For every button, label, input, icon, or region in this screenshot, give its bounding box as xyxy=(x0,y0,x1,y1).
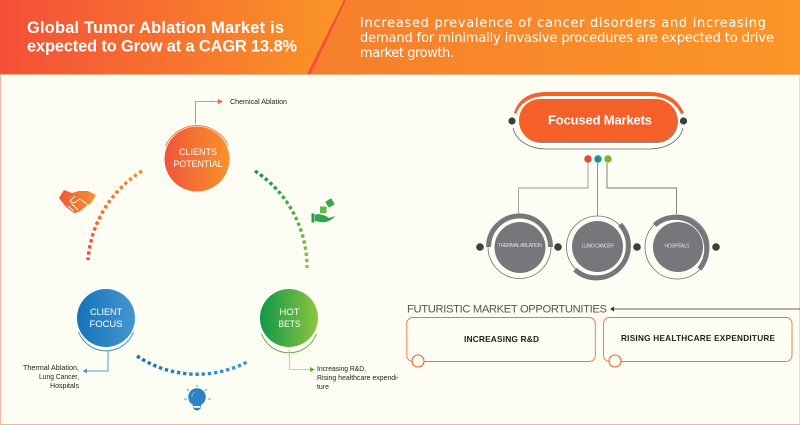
market node: hospitals xyxy=(645,215,709,279)
header description: market growth. xyxy=(360,46,454,61)
callout: hot bets opportunities: ture xyxy=(317,382,329,391)
focused markets pill xyxy=(508,92,687,149)
node: hot bets: BETS xyxy=(278,319,300,330)
callout: hot bets opportunities xyxy=(290,350,399,391)
callout: client focus markets: Lung Cancer, xyxy=(39,372,79,381)
opportunity card: rising healthcare expenditure: RISING HEALTHCARE EXPENDITURE xyxy=(621,334,776,343)
node: client focus: FOCUS xyxy=(90,319,122,330)
node: clients potential: CLIENTS xyxy=(179,147,217,157)
arrow: opportunities pointer xyxy=(610,306,800,312)
header banner xyxy=(0,0,800,75)
heading: futuristic market opportunities: FUTURISTIC MARKET OPPORTUNITIES xyxy=(407,304,607,316)
market node: hospitals: HOSPITALS xyxy=(664,244,690,250)
callout: client focus markets: Hospitals xyxy=(50,381,79,390)
header description: demand for minimally invasive procedures are expected to drive xyxy=(360,31,774,46)
node: clients potential: POTENTIAL xyxy=(174,159,222,169)
icon: hand with money xyxy=(312,198,335,222)
callout: chemical ablation xyxy=(196,97,287,124)
dotted arc: green xyxy=(255,171,307,268)
header title: expected to Grow at a CAGR 13.8% xyxy=(27,38,297,56)
market node: thermal ablation xyxy=(488,216,551,278)
market node: lung cancer xyxy=(566,216,628,278)
callout: chemical ablation: Chemical Ablation xyxy=(230,97,287,106)
header description: Increased prevalence of cancer disorders and increasing xyxy=(360,16,766,31)
connector dots xyxy=(584,155,612,163)
connector lines xyxy=(518,163,676,216)
node: client focus xyxy=(77,289,135,351)
node: clients potential xyxy=(164,126,230,192)
market node: thermal ablation: THERMAL ABLATION xyxy=(498,243,542,249)
node: hot bets xyxy=(260,289,318,353)
opportunity card: increasing R&D: INCREASING R&D xyxy=(464,334,539,344)
icon: handshake xyxy=(59,190,96,213)
market node: lung cancer: LUNG CANCER xyxy=(582,244,614,250)
dotted arc: orange xyxy=(88,171,142,260)
dotted arc: blue xyxy=(137,356,247,374)
opportunity card: increasing R&D xyxy=(407,318,595,367)
node: hot bets: HOT xyxy=(280,307,300,318)
icon: light bulb xyxy=(184,385,211,410)
header title: Global Tumor Ablation Market is xyxy=(27,19,284,37)
node: client focus: CLIENT xyxy=(90,307,122,318)
callout: client focus markets: Thermal Ablation, xyxy=(23,363,79,372)
opportunity card: rising healthcare expenditure xyxy=(604,318,792,367)
callout: hot bets opportunities: Increasing R&D, xyxy=(317,364,366,373)
callout: hot bets opportunities: Rising healthcare expendi- xyxy=(317,373,399,382)
pill label: Focused Markets xyxy=(548,113,652,128)
callout: client focus markets xyxy=(23,351,108,390)
node connector dots xyxy=(476,243,720,251)
